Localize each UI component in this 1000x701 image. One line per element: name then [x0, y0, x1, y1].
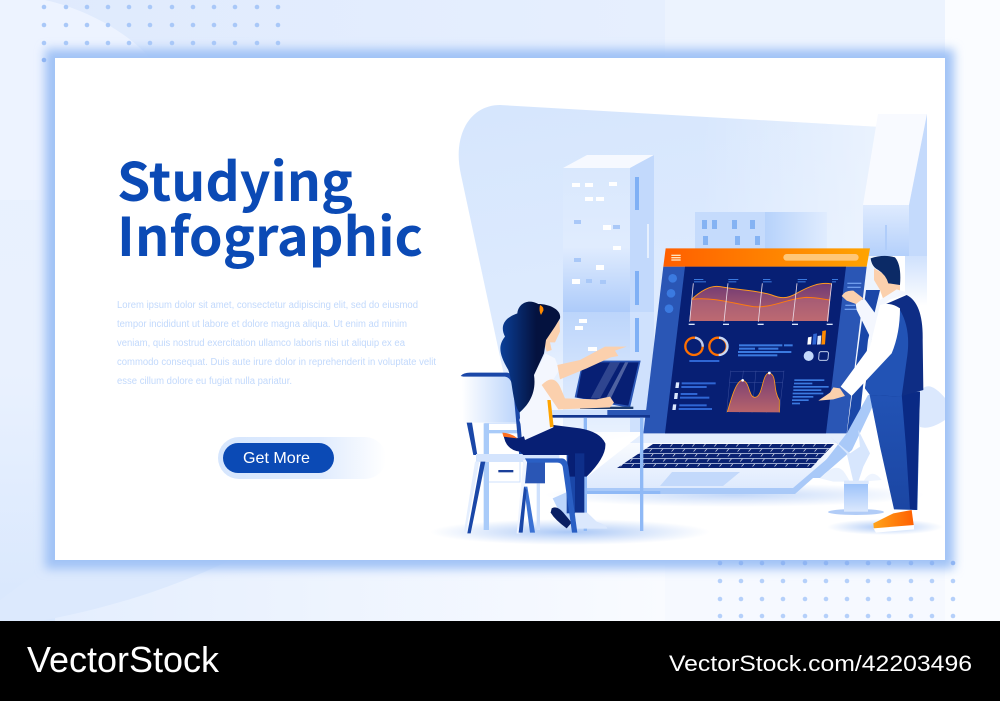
sidebar dots [665, 274, 677, 313]
keyboard [617, 444, 834, 468]
hair tie [540, 305, 543, 315]
table [552, 410, 660, 531]
dot grid: top left [42, 5, 280, 62]
laptop screen dashboard [643, 248, 870, 433]
drawer cabinet [484, 423, 540, 530]
chair legs [464, 458, 577, 533]
circle and square controls [804, 351, 829, 361]
text bars: lower right [792, 379, 829, 404]
text bars: middle [738, 344, 793, 356]
body paragraph: commodo consequat. Duis aute irure dolor in reprehenderit in voluptate velit [117, 357, 436, 368]
trousers [869, 392, 920, 510]
laptop base and keyboard [585, 433, 848, 494]
text bars: right rail [845, 283, 861, 310]
rear arm with hand [855, 299, 880, 340]
chair back and seat [461, 373, 559, 483]
mini bar chart [807, 330, 826, 345]
mountain chart [727, 371, 784, 413]
footer brand: VectorStock [27, 639, 220, 680]
shirt [519, 353, 559, 440]
building: tall tower [563, 155, 654, 432]
title [117, 141, 423, 272]
trackpad [660, 472, 740, 486]
backdrop blob [459, 105, 880, 450]
man standing [818, 256, 923, 533]
white card panel [55, 58, 945, 560]
small laptop [575, 361, 641, 409]
title: Studying [117, 141, 353, 217]
front arm with hand [841, 304, 900, 396]
orange title bar [663, 248, 870, 267]
building: middle block [695, 212, 827, 250]
head and neck [874, 268, 900, 299]
trousers [503, 425, 605, 513]
button: Get More [218, 437, 386, 479]
footer image id: VectorStock.com/42203496 [669, 651, 972, 676]
vest [865, 295, 923, 397]
body paragraph [117, 300, 436, 387]
shoe [873, 510, 914, 533]
screen rear stand [812, 290, 880, 478]
footer black bar [0, 621, 1000, 701]
hair [500, 302, 560, 413]
donut charts [685, 338, 728, 362]
front shoe [575, 513, 607, 529]
floor shadows [430, 483, 943, 545]
building: right block [863, 114, 927, 306]
list rows [672, 382, 716, 410]
button: Get More: Get More [243, 450, 310, 467]
body paragraph: esse cillum dolore eu fugiat nulla pariatur. [117, 376, 292, 387]
face and neck [544, 320, 560, 352]
lower arm [542, 380, 614, 409]
raised arm [557, 347, 627, 379]
area line chart [689, 279, 838, 325]
orange chair accent [502, 433, 517, 438]
dot grid: bottom right [718, 561, 955, 618]
body paragraph: Lorem ipsum dolor sit amet, consectetur adipiscing elit, sed do eiusmod [117, 300, 418, 311]
collar [880, 289, 910, 308]
back foot and shoe [551, 490, 578, 528]
body paragraph: veniam, quis nostrud exercitation ullamco laboris nisi ut aliquip ex ea [117, 338, 405, 349]
hair [871, 256, 900, 285]
woman at desk [461, 302, 627, 533]
plant [820, 430, 882, 512]
background mountain shape [920, 386, 945, 428]
body paragraph: tempor incididunt ut labore et dolore magna aliqua. Ut enim ad minim [117, 319, 407, 330]
table and small laptop [484, 361, 660, 531]
title: Infographic [117, 196, 423, 272]
card glow [45, 49, 954, 569]
